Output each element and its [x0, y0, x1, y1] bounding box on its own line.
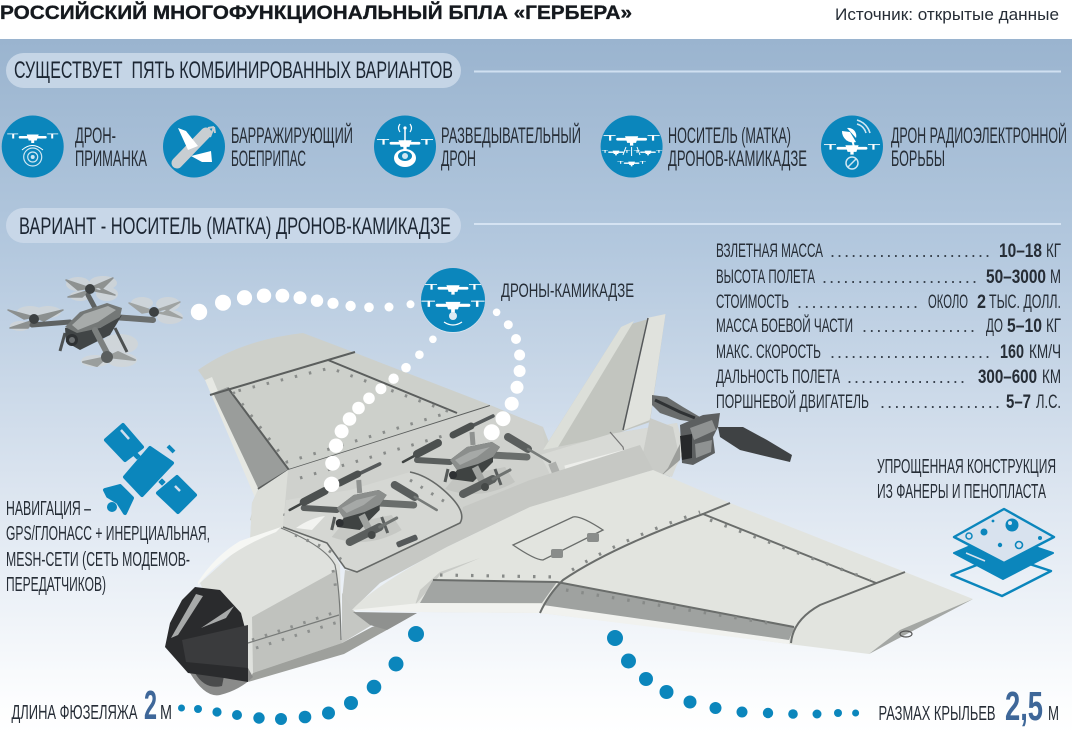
spec: altitude: 50–3000 [986, 267, 1046, 288]
spec: piston engine: 5–7 [1006, 392, 1031, 413]
spec: max speed: 160 [1000, 342, 1024, 363]
wingspan label [878, 683, 1059, 729]
spec: cost [716, 292, 1061, 313]
spec: range: . . . . . . . . . . . . . . . . . [847, 367, 965, 387]
spec: piston engine [716, 391, 1061, 413]
navigation note: ПЕРЕДАТЧИКОВ) [6, 574, 106, 596]
variant: reconnaissance drone: ДРОН [441, 146, 476, 171]
spec: warhead mass: МАССА БОЕВОЙ ЧАСТИ [716, 315, 853, 337]
fin [543, 314, 666, 450]
fuselage length label [12, 682, 172, 728]
spec: warhead mass: 5–10 [1007, 316, 1042, 337]
spec: altitude: ВЫСОТА ПОЛЕТА [716, 267, 815, 288]
fuselage length label: М [160, 702, 172, 724]
spec: max speed: МАКС. СКОРОСТЬ [716, 342, 821, 363]
spec: max speed [716, 342, 1061, 363]
engine and propeller [652, 395, 792, 465]
nose dome [165, 587, 253, 695]
spec: altitude: . . . . . . . . . . . . . . . . . . . . . . [822, 267, 977, 287]
variant: carrier of kamikaze drones [601, 116, 807, 178]
fuselage length label: ДЛИНА ФЮЗЕЛЯЖА [12, 702, 138, 724]
spec: cost: . . . . . . . . . . . . . . . . . [797, 292, 918, 312]
spec: takeoff mass: . . . . . . . . . . . . . . . . . . . . . . . [830, 241, 990, 261]
tail boom [540, 423, 684, 497]
far wing [198, 333, 560, 540]
spec: range [716, 367, 1061, 388]
navigation note: MESH-СЕТИ (СЕТЬ МОДЕМОВ- [6, 549, 190, 571]
variant: reconnaissance drone: РАЗВЕДЫВАТЕЛЬНЫЙ [441, 123, 581, 148]
kamikaze drone rear [403, 416, 550, 494]
variant: loitering munition [163, 116, 353, 178]
rear fuselage [250, 406, 684, 560]
white dotted path to the drone [191, 288, 414, 320]
spec: max speed: . . . . . . . . . . . . . . . . . . . . . . . [830, 342, 990, 362]
fuselage length label: 2 [144, 682, 157, 728]
spec: piston engine: Л.С. [1036, 392, 1061, 413]
spec: piston engine: ПОРШНЕВОЙ ДВИГАТЕЛЬ [716, 391, 869, 413]
spec: takeoff mass: ВЗЛЕТНАЯ МАССА [716, 241, 823, 262]
specifications table [716, 241, 1061, 413]
variant: loitering munition: БАРРАЖИРУЮЩИЙ [231, 123, 353, 148]
heading: five variants: СУЩЕСТВУЕТ ПЯТЬ КОМБИНИРОВАННЫХ ВАРИАНТОВ [14, 57, 453, 84]
blue dotted path: wingspan [607, 630, 859, 719]
navigation note [6, 498, 210, 596]
white dotted path right [484, 308, 526, 440]
hull band behind hatch [342, 445, 653, 612]
variant: electronic warfare drone [821, 116, 1067, 178]
icon: kamikaze drones [421, 268, 485, 333]
spec: takeoff mass [716, 241, 1061, 262]
blue dotted path: fuselage [178, 626, 424, 725]
variant: loitering munition: БОЕПРИПАС [231, 146, 306, 171]
variant: carrier of kamikaze drones: ДРОНОВ-КАМИКАДЗЕ [668, 146, 807, 171]
wingspan label: РАЗМАХ КРЫЛЬЕВ [878, 703, 996, 725]
source note: Источник: открытые данные [835, 5, 1059, 24]
variant: decoy drone [2, 116, 147, 178]
kamikaze drone front [290, 464, 437, 542]
spec: range: ДАЛЬНОСТЬ ПОЛЕТА [716, 367, 840, 388]
spec: range: 300–600 [978, 367, 1037, 388]
near wing [352, 470, 973, 654]
navigation note: GPS/ГЛОНАСС + ИНЕРЦИАЛЬНАЯ, [6, 523, 210, 545]
large carrier-launched drone [8, 276, 183, 367]
spec: takeoff mass: 10–18 [999, 241, 1042, 262]
variant: reconnaissance drone [374, 116, 581, 178]
wingspan label: 2,5 [1005, 683, 1043, 729]
variant: decoy drone: ПРИМАНКА [75, 146, 147, 171]
spec: cost: 2 [977, 292, 986, 313]
spec: cost: ОКОЛО [928, 292, 968, 313]
spec: warhead mass [716, 315, 1061, 337]
icon: layered plywood and foam [952, 509, 1054, 596]
spec: warhead mass: КГ [1046, 316, 1061, 337]
heading: five variants [6, 53, 1061, 88]
spec: altitude [716, 267, 1061, 288]
variant: decoy drone: ДРОН- [75, 123, 116, 148]
spec: altitude: М [1050, 267, 1061, 288]
spec: warhead mass: . . . . . . . . . . . . . . . . [862, 316, 975, 336]
wingspan label: М [1048, 703, 1059, 725]
plane illustration [165, 314, 973, 695]
variant: electronic warfare drone: БОРЬБЫ [891, 146, 945, 171]
main hull [200, 527, 342, 682]
spec: takeoff mass: КГ [1046, 241, 1061, 262]
icon: satellite [105, 425, 195, 513]
navigation note: НАВИГАЦИЯ – [6, 498, 92, 520]
construction note [877, 456, 1056, 503]
variant: carrier of kamikaze drones: НОСИТЕЛЬ (МАТКА) [668, 123, 791, 148]
white dotted path left [324, 336, 437, 492]
spec: piston engine: . . . . . . . . . . . . . . . . . [880, 392, 1000, 412]
label: kamikaze drones: ДРОНЫ-КАМИКАДЗЕ [501, 281, 634, 302]
spec: range: КМ [1042, 367, 1061, 388]
spec: warhead mass: ДО [986, 316, 1003, 337]
spec: cost: СТОИМОСТЬ [716, 292, 789, 313]
drone bay hatch [283, 472, 462, 572]
heading: carrier variant: ВАРИАНТ - НОСИТЕЛЬ (МАТКА) ДРОНОВ-КАМИКАДЗЕ [19, 213, 451, 240]
title: РОССИЙСКИЙ МНОГОФУНКЦИОНАЛЬНЫЙ БПЛА «ГЕРБЕРА» [0, 0, 632, 24]
heading: carrier variant [6, 208, 1061, 243]
